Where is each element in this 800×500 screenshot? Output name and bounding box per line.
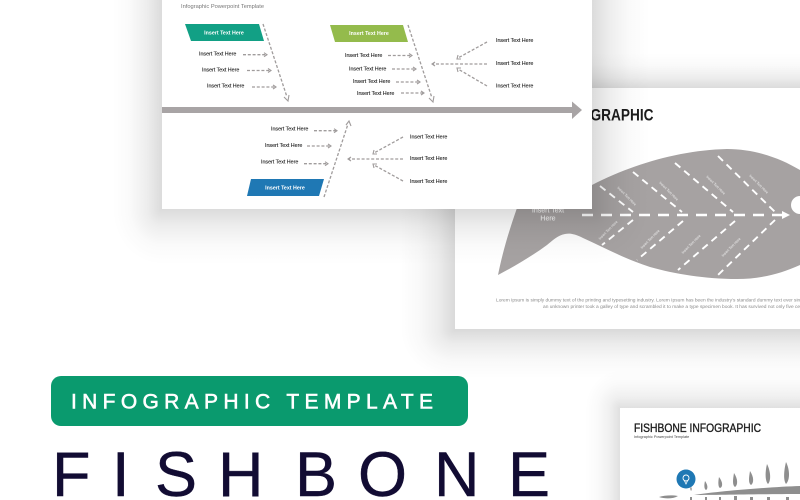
green group labels: Insert Text Here xyxy=(345,53,382,59)
green group arrows xyxy=(388,54,424,95)
fish head text: Insert Text xyxy=(532,208,564,214)
right upper labels xyxy=(496,38,533,90)
right upper labels: Insert Text Here xyxy=(496,38,533,44)
fish bone labels xyxy=(598,174,769,258)
slide title: FISHBONE INFOGRAPHIC xyxy=(634,421,761,435)
teal group labels xyxy=(199,52,244,90)
green group labels: Insert Text Here xyxy=(357,91,394,97)
teal category box: Insert Text Here xyxy=(204,30,244,36)
main spine arrow xyxy=(162,102,582,119)
panel: main fishbone slide xyxy=(162,0,592,209)
diagonal bones xyxy=(263,24,434,197)
right upper arrows xyxy=(432,42,487,86)
right upper labels: Insert Text Here xyxy=(496,84,533,90)
panel: fish slide xyxy=(455,88,800,329)
slide subtitle: Infographic Powerpoint Template xyxy=(634,435,689,439)
bottom group labels: Insert Text Here xyxy=(261,160,298,166)
badge: infographic template xyxy=(51,376,468,426)
blue category box xyxy=(247,179,324,196)
green group labels: Insert Text Here xyxy=(349,66,386,72)
badge and title block xyxy=(51,376,550,500)
teal category box xyxy=(185,24,264,41)
fish bone labels: Insert Text Here xyxy=(616,186,637,207)
fish shape xyxy=(498,149,800,279)
bottom group arrows xyxy=(304,129,337,166)
bottom right labels xyxy=(410,134,447,185)
fish bone labels: Insert Text Here xyxy=(721,237,742,258)
fish skeleton spikes xyxy=(659,462,800,500)
fish bones xyxy=(600,156,775,275)
blue category box: Insert Text Here xyxy=(265,186,305,192)
lorem ipsum caption xyxy=(496,298,800,310)
teal group labels: Insert Text Here xyxy=(199,52,236,58)
lorem ipsum caption: Lorem Ipsum is simply dummy text of the printing and typesetting industry. Lorem Ipsum has been the industry's standard dummy text ever since xyxy=(496,298,800,304)
teal group arrows xyxy=(243,53,276,89)
fish spine arrow xyxy=(582,211,790,219)
teal group labels: Insert Text Here xyxy=(202,67,239,73)
green group labels: Insert Text Here xyxy=(353,79,390,85)
green group labels xyxy=(345,53,394,97)
teal group labels: Insert Text Here xyxy=(207,84,244,90)
bottom group labels xyxy=(261,126,308,166)
bottom right labels: Insert Text Here xyxy=(410,134,447,140)
green category box xyxy=(330,25,408,42)
slide heading: GRAPHIC xyxy=(590,106,654,124)
bottom group labels: Insert Text Here xyxy=(271,126,308,132)
fish bone labels: Insert Text Here xyxy=(748,174,769,195)
fish bone labels: Insert Text Here xyxy=(658,181,679,202)
icon: blue location pin xyxy=(676,470,696,488)
fish bone labels: Insert Text Here xyxy=(598,220,619,241)
fish bone labels: Insert Text Here xyxy=(705,175,726,196)
bottom right labels: Insert Text Here xyxy=(410,179,447,185)
fish head text second line: Here xyxy=(540,216,556,222)
right upper labels: Insert Text Here xyxy=(496,61,533,67)
slide subtitle: Infographic Powerpoint Template xyxy=(181,4,264,10)
badge: infographic template: INFOGRAPHIC TEMPLATE xyxy=(71,390,433,414)
fish bone labels: Insert Text Here xyxy=(681,234,702,255)
green category box: Insert Text Here xyxy=(349,31,389,37)
bottom right arrows xyxy=(348,137,403,181)
panel: bottom right slide xyxy=(620,408,800,500)
fish bone labels: Insert Text Here xyxy=(640,229,661,250)
bottom group labels: Insert Text Here xyxy=(265,143,302,149)
bottom right labels: Insert Text Here xyxy=(410,156,447,162)
